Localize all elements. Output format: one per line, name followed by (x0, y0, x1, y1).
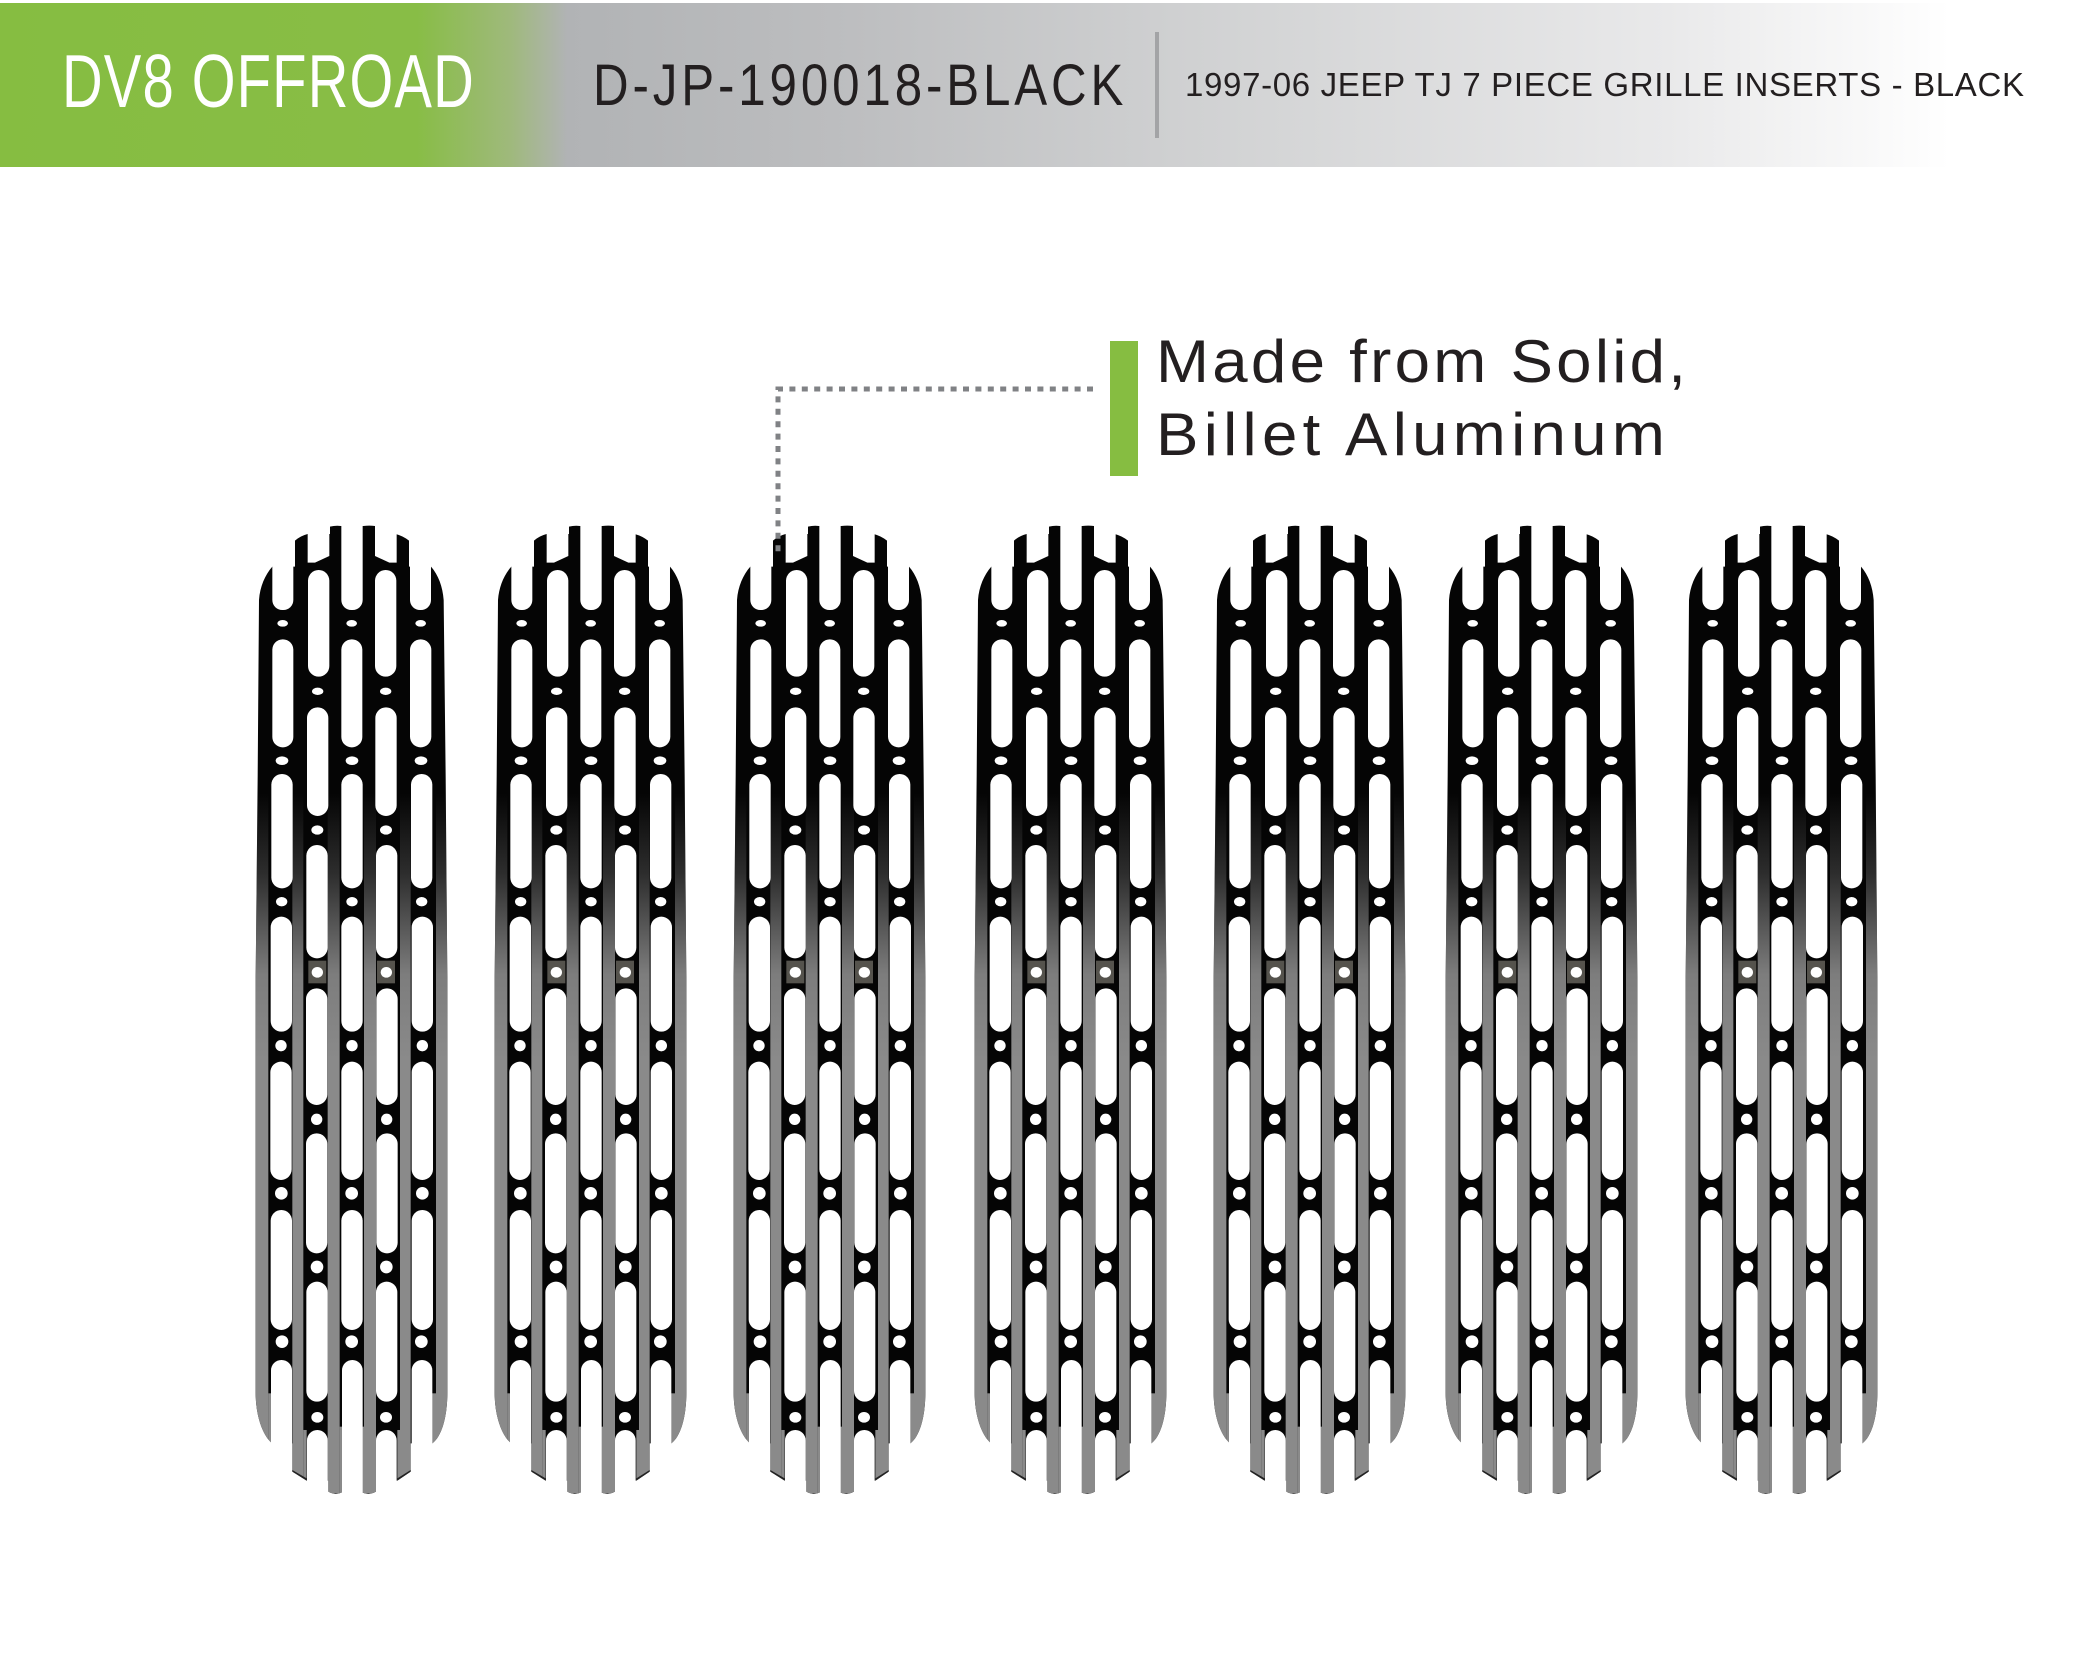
grille insert 2 (495, 490, 686, 1530)
grille insert 7 (1686, 490, 1877, 1530)
brand name: DV8 OFFROAD (62, 40, 474, 124)
grille insert 3 (734, 490, 925, 1530)
callout text: Made from Solid, (1156, 329, 1686, 396)
product title: 1997-06 JEEP TJ 7 PIECE GRILLE INSERTS - BLACK (1185, 66, 2024, 103)
callout text: Billet Aluminum (1156, 402, 1665, 469)
callout: green accent bar (1110, 341, 1138, 476)
callout leader line (778, 389, 1093, 552)
grille insert 1 (256, 490, 447, 1530)
header banner (0, 3, 2085, 167)
callout text (1156, 329, 1686, 469)
grille insert 4 (975, 490, 1166, 1530)
header divider (1155, 32, 1159, 138)
part number: D-JP-190018-BLACK (593, 53, 1123, 118)
grille insert 5 (1214, 490, 1405, 1530)
grille insert 6 (1446, 490, 1637, 1530)
